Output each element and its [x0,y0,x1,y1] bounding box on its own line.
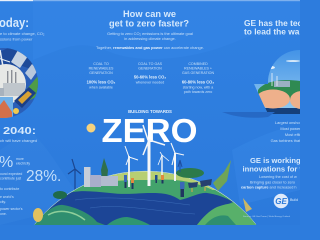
left intro text: e to climate change, CO₂ [0,31,45,36]
shore trees on the globe edge [33,191,67,222]
statistic: percent more electricity: more [16,157,24,161]
column: combined renewables and gas: RENEWABLES + [184,66,212,70]
center intro text: Getting to zero CO₂ emissions is the ultimate goal [107,31,193,36]
far hill beside turbines [176,168,204,178]
left notes: to contribute [0,187,19,191]
column: coal to gas: whenever needed [136,80,164,84]
GE logo [274,194,288,208]
column: coal to renewables: RENEWABLES [89,66,114,70]
column: coal to gas: COAL TO GAS [138,62,163,66]
workers [124,175,184,197]
innovation text: Lowering the cost of w [259,175,297,179]
left notes [0,187,23,216]
center intro text: in addressing climate change. [124,36,176,41]
tree left [101,158,108,180]
statistic: percent more electricity [0,154,30,171]
statistic: 28 percent: contribute just [0,176,21,180]
center heading: How can we [123,9,176,19]
left notes: one. [0,212,7,216]
center heading [109,9,189,28]
column: combined renewables and gas: COMBINED [188,62,208,66]
heading: GE has the technology: to lead the wa [244,26,300,36]
right list text [271,120,320,143]
innovation text: carbon capture and increased h [241,186,297,190]
column: combined renewables and gas: GAS GENERATION [182,71,214,75]
icon: sun [86,124,96,132]
heading: 2040: 2040: [3,125,36,137]
left heading: today: oday: [0,15,29,30]
column: combined renewables and gas: starting now, with a [183,86,213,90]
column: combined renewables and gas: path towards zero [184,90,212,94]
shadow shape below the hands [222,112,275,118]
left notes: e world's [0,195,14,199]
statistic: 28 percent [0,168,61,185]
column: coal to gas: GENERATION [138,66,162,70]
dark turbine near ZERO [178,160,182,172]
left notes: city. [0,200,6,204]
heading: GE is working [242,156,302,174]
column: coal to gas: 50-60% less CO₂ [134,74,166,80]
ZERO title: ZERO [102,112,198,149]
column: coal to renewables: GENERATION [89,71,113,75]
yellow leaves at globe edge [243,198,252,212]
innovation text [241,175,297,190]
industrial buildings [84,167,118,187]
left intro text: ssions from power [0,36,33,42]
innovation text: Bringing gas closer to zero [250,180,295,184]
statistic: 28 percent: 28%. [26,168,61,185]
logo tagline: Build [290,198,298,202]
statistic: 28 percent: ound expected [0,172,22,176]
wind turbines [125,125,184,187]
heading: GE is working: GE is working [250,156,300,165]
center heading: get to zero faster? [109,18,189,28]
GE logo: GE [275,197,287,206]
left circle illustration: power plants [0,48,38,118]
column: coal to renewables: when available [89,86,113,90]
statistic: percent more electricity: electricity [16,162,30,166]
column: combined renewables and gas [182,62,214,94]
solar panels [188,179,212,192]
right foliage [213,160,231,191]
column: coal to gas [134,62,166,84]
left notes: power sector's [0,207,23,211]
distant dark turbine [68,159,81,190]
heading: GE has the technology [244,18,303,36]
column: combined renewables and gas: 60-80% less CO₂ [182,80,214,84]
right circle: earth in hands [254,50,300,114]
footnote: Sources: GE Gas Power | World Energy Outlook [243,215,291,218]
column: coal to renewables: 100% less CO₂ [87,80,116,84]
column: coal to renewables: COAL TO [93,62,109,66]
left intro text [0,31,45,42]
center intro text [96,31,204,50]
center intro text: Together, renewables and gas power can accelerate change. [96,45,204,50]
building towards label: BUILDING TOWARDS [128,109,172,114]
column: coal to renewables [87,62,116,90]
subheading: what will have changed: ch will have changed [0,138,37,143]
globe landscape [34,170,256,225]
